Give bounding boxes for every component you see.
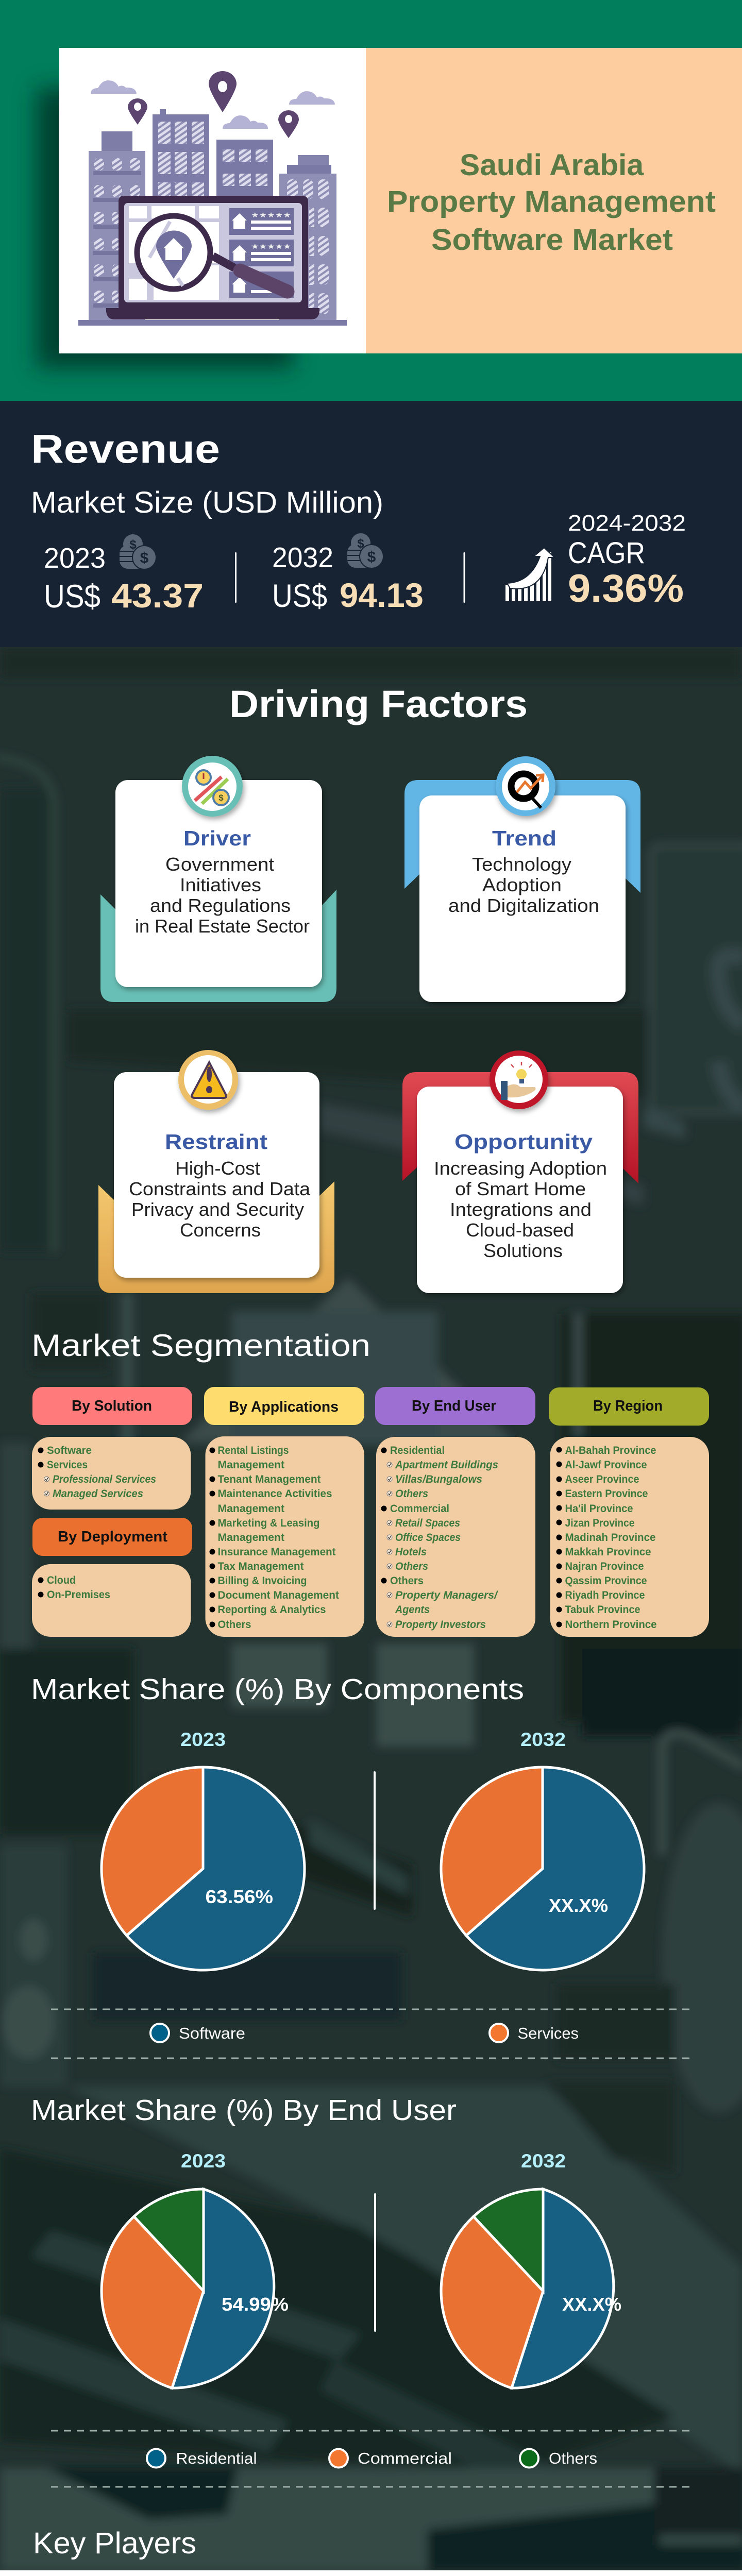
icon: coins 2032: $ [357, 537, 364, 551]
legend: components: Services [517, 2024, 579, 2042]
stat: cagr [568, 511, 686, 611]
icon: coins 2023: $ [140, 550, 149, 567]
divider [235, 552, 237, 603]
list: applications: Insurance Management [217, 1546, 336, 1558]
stat: 2023: US$ [44, 579, 100, 615]
panel: by applications [204, 1387, 364, 1637]
panel: by region: By Region [593, 1398, 663, 1414]
chart: components 2032: 2032 [520, 1729, 566, 1750]
list: applications [209, 1445, 339, 1631]
list: solution [38, 1445, 156, 1500]
text: opportunity: Integrations and [450, 1199, 592, 1220]
list: solution: Software [47, 1445, 92, 1456]
list: region: Madinah Province [565, 1532, 655, 1544]
list: applications: Management [217, 1532, 284, 1544]
panel: by deployment: By Deployment [58, 1529, 167, 1545]
heading: market segmentation: Market Segmentation [31, 1328, 370, 1363]
list: end user: Retail Spaces [395, 1517, 460, 1529]
panel: driver [100, 756, 336, 1002]
icon: opportunity [490, 1050, 548, 1109]
chart: components 2032: XX.X% [549, 1895, 608, 1916]
stat: 2023 [44, 542, 204, 615]
icon: coins 2023 [120, 534, 156, 569]
title: Saudi Arabia [460, 148, 644, 182]
list: deployment: Cloud [47, 1574, 76, 1586]
list: applications: Rental Listings [217, 1445, 289, 1456]
divider [374, 2193, 376, 2332]
panel: opportunity [402, 1050, 638, 1293]
list: end user: Others [395, 1561, 428, 1572]
panel: photo background [0, 647, 742, 2571]
text: opportunity: of Smart Home [455, 1178, 586, 1199]
stat: cagr: 9.36% [568, 567, 684, 611]
text: trend: and Digitalization [448, 895, 599, 916]
list: applications: Marketing & Leasing [217, 1517, 319, 1529]
list: end user: Hotels [395, 1546, 427, 1558]
text: driver: in Real Estate Sector [135, 916, 310, 937]
text: driver: Initiatives [180, 874, 261, 895]
list: end user: Commercial [390, 1503, 449, 1515]
list: end user: Property Managers/ [395, 1589, 498, 1601]
heading: revenue: Revenue [31, 426, 220, 471]
stat: 2023: 43.37 [111, 577, 204, 615]
list: region: Ha'il Province [565, 1503, 633, 1515]
list: end user: Property Investors [395, 1619, 486, 1631]
list: end user: Agents [395, 1604, 430, 1616]
panel: key players logos [0, 2570, 742, 2576]
text: restraint: High-Cost [175, 1158, 260, 1179]
panel: revenue [0, 401, 742, 647]
text: trend: Adoption [482, 874, 562, 895]
legend: end user: Others [549, 2449, 597, 2467]
list: solution: Professional Services [53, 1473, 156, 1485]
list: region: Qassim Province [565, 1575, 647, 1587]
panel: by end user [375, 1387, 535, 1637]
legend: components [150, 2024, 579, 2042]
panel: by solution [32, 1387, 192, 1510]
stat: 2023: 2023 [44, 542, 106, 574]
chart: end user 2023 [102, 2150, 289, 2388]
panel: trend [404, 756, 640, 1002]
chart: end user 2023: 2023 [181, 2150, 226, 2172]
list: region: Riyadh Province [565, 1589, 645, 1601]
text: restraint: Privacy and Security [131, 1199, 304, 1220]
legend: components: Software [179, 2024, 245, 2042]
heading: driving factors: Driving Factors [229, 683, 528, 725]
list: region: Jizan Province [565, 1517, 635, 1529]
text: restraint [129, 1130, 311, 1241]
text: restraint: Restraint [165, 1130, 267, 1154]
chart: components 2023 [102, 1729, 305, 1970]
icon: coins 2032 [347, 533, 383, 568]
list: applications: Others [217, 1619, 251, 1631]
list: region [556, 1445, 656, 1631]
panel: title background [366, 48, 742, 353]
text: driver: Driver [183, 826, 251, 850]
text: opportunity: Solutions [483, 1240, 563, 1261]
text: trend: Technology [472, 854, 571, 875]
list: end user: Others [390, 1575, 424, 1587]
text: opportunity: Opportunity [454, 1130, 593, 1154]
text: driver: and Regulations [150, 895, 291, 916]
chart: end user 2032: 2032 [521, 2150, 566, 2172]
list: region: Najran Province [565, 1561, 644, 1572]
chart: end user 2032: XX.X% [562, 2294, 621, 2315]
panel: by end user: By End User [412, 1398, 496, 1414]
divider [464, 552, 465, 603]
icon: driver [182, 756, 243, 817]
list: applications: Document Management [217, 1589, 339, 1601]
stat: 2032: 2032 [272, 541, 333, 573]
list: region: Makkah Province [565, 1546, 651, 1558]
list: end user: Others [395, 1488, 428, 1500]
panel: by deployment [32, 1518, 192, 1637]
legend: end user: Residential [176, 2449, 257, 2467]
list: deployment [38, 1574, 110, 1601]
stat: 2032: 94.13 [340, 576, 424, 614]
heading: market share by components: Market Share (%) By Components [31, 1673, 524, 1706]
text: restraint: Constraints and Data [129, 1178, 311, 1199]
text: trend [448, 826, 599, 916]
text: driver [135, 826, 310, 937]
title: Software Market [431, 223, 673, 257]
list: applications: Management [217, 1503, 284, 1515]
list: applications: Tax Management [217, 1561, 304, 1572]
list: end user: Office Spaces [395, 1532, 461, 1544]
stat: cagr: CAGR [568, 536, 645, 570]
list: applications: Tenant Management [217, 1473, 321, 1485]
panel: illustration background [59, 48, 366, 353]
icon: coins 2023: $ [129, 538, 137, 552]
list: region: Aseer Province [565, 1473, 639, 1485]
list: region: Al-Bahah Province [565, 1445, 656, 1456]
illustration: property search: ★★★★★ [251, 211, 291, 219]
heading: market share by end user: Market Share (%) By End User [31, 2094, 457, 2127]
list: applications: Maintenance Activities [217, 1488, 332, 1500]
illustration: property search: ★★★★★ [251, 243, 291, 251]
chart: end user 2032 [441, 2150, 621, 2388]
list: solution: Managed Services [53, 1488, 143, 1500]
icon: coins 2032: $ [367, 549, 376, 566]
list: region: Al-Jawf Province [565, 1459, 647, 1471]
divider [374, 1771, 376, 1910]
list: end user: Apartment Buildings [395, 1459, 498, 1471]
chart: components 2023: 63.56% [205, 1886, 273, 1907]
list: region: Northern Province [565, 1619, 656, 1631]
illustration: property search [78, 71, 347, 326]
stat: cagr: 2024-2032 [568, 511, 686, 536]
text: driver: Government [165, 854, 274, 875]
icon: trend [496, 756, 555, 816]
list: applications: Billing & Invoicing [217, 1575, 307, 1587]
text: opportunity: Cloud-based [466, 1219, 574, 1241]
chart: end user 2023: 54.99% [222, 2294, 289, 2315]
list: applications: Reporting & Analytics [217, 1604, 326, 1616]
panel: by solution: By Solution [72, 1398, 152, 1414]
stat: 2032: US$ [272, 578, 327, 614]
list: end user: Villas/Bungalows [395, 1473, 482, 1485]
text: opportunity: Increasing Adoption [434, 1158, 607, 1179]
legend: end user: Commercial [358, 2449, 452, 2467]
text: opportunity [434, 1130, 607, 1261]
list: deployment: On-Premises [47, 1589, 110, 1601]
chart: components 2032 [441, 1729, 644, 1970]
title [387, 148, 716, 257]
panel: by applications: By Applications [229, 1399, 339, 1415]
panel: by region [549, 1387, 709, 1637]
list: region: Eastern Province [565, 1488, 648, 1500]
icon: restraint [178, 1050, 238, 1110]
text: trend: Trend [492, 826, 556, 850]
list: region: Tabuk Province [565, 1604, 640, 1616]
title: Property Management [387, 185, 716, 218]
list: solution: Services [47, 1459, 88, 1471]
text: market size: Market Size (USD Million) [31, 486, 383, 519]
list: applications: Management [217, 1459, 284, 1471]
icon: driver: $ [218, 793, 224, 803]
stat: 2032 [272, 541, 424, 614]
chart: components 2023: 2023 [180, 1729, 226, 1750]
panel: restraint [98, 1050, 334, 1293]
list: end user [381, 1445, 498, 1631]
icon: growth arrow [505, 548, 554, 601]
heading: key players: Key Players [33, 2527, 196, 2560]
text: restraint: Concerns [180, 1219, 261, 1241]
list: end user: Residential [390, 1445, 445, 1456]
panel: hero banner [0, 0, 742, 401]
legend: end user [147, 2449, 597, 2468]
